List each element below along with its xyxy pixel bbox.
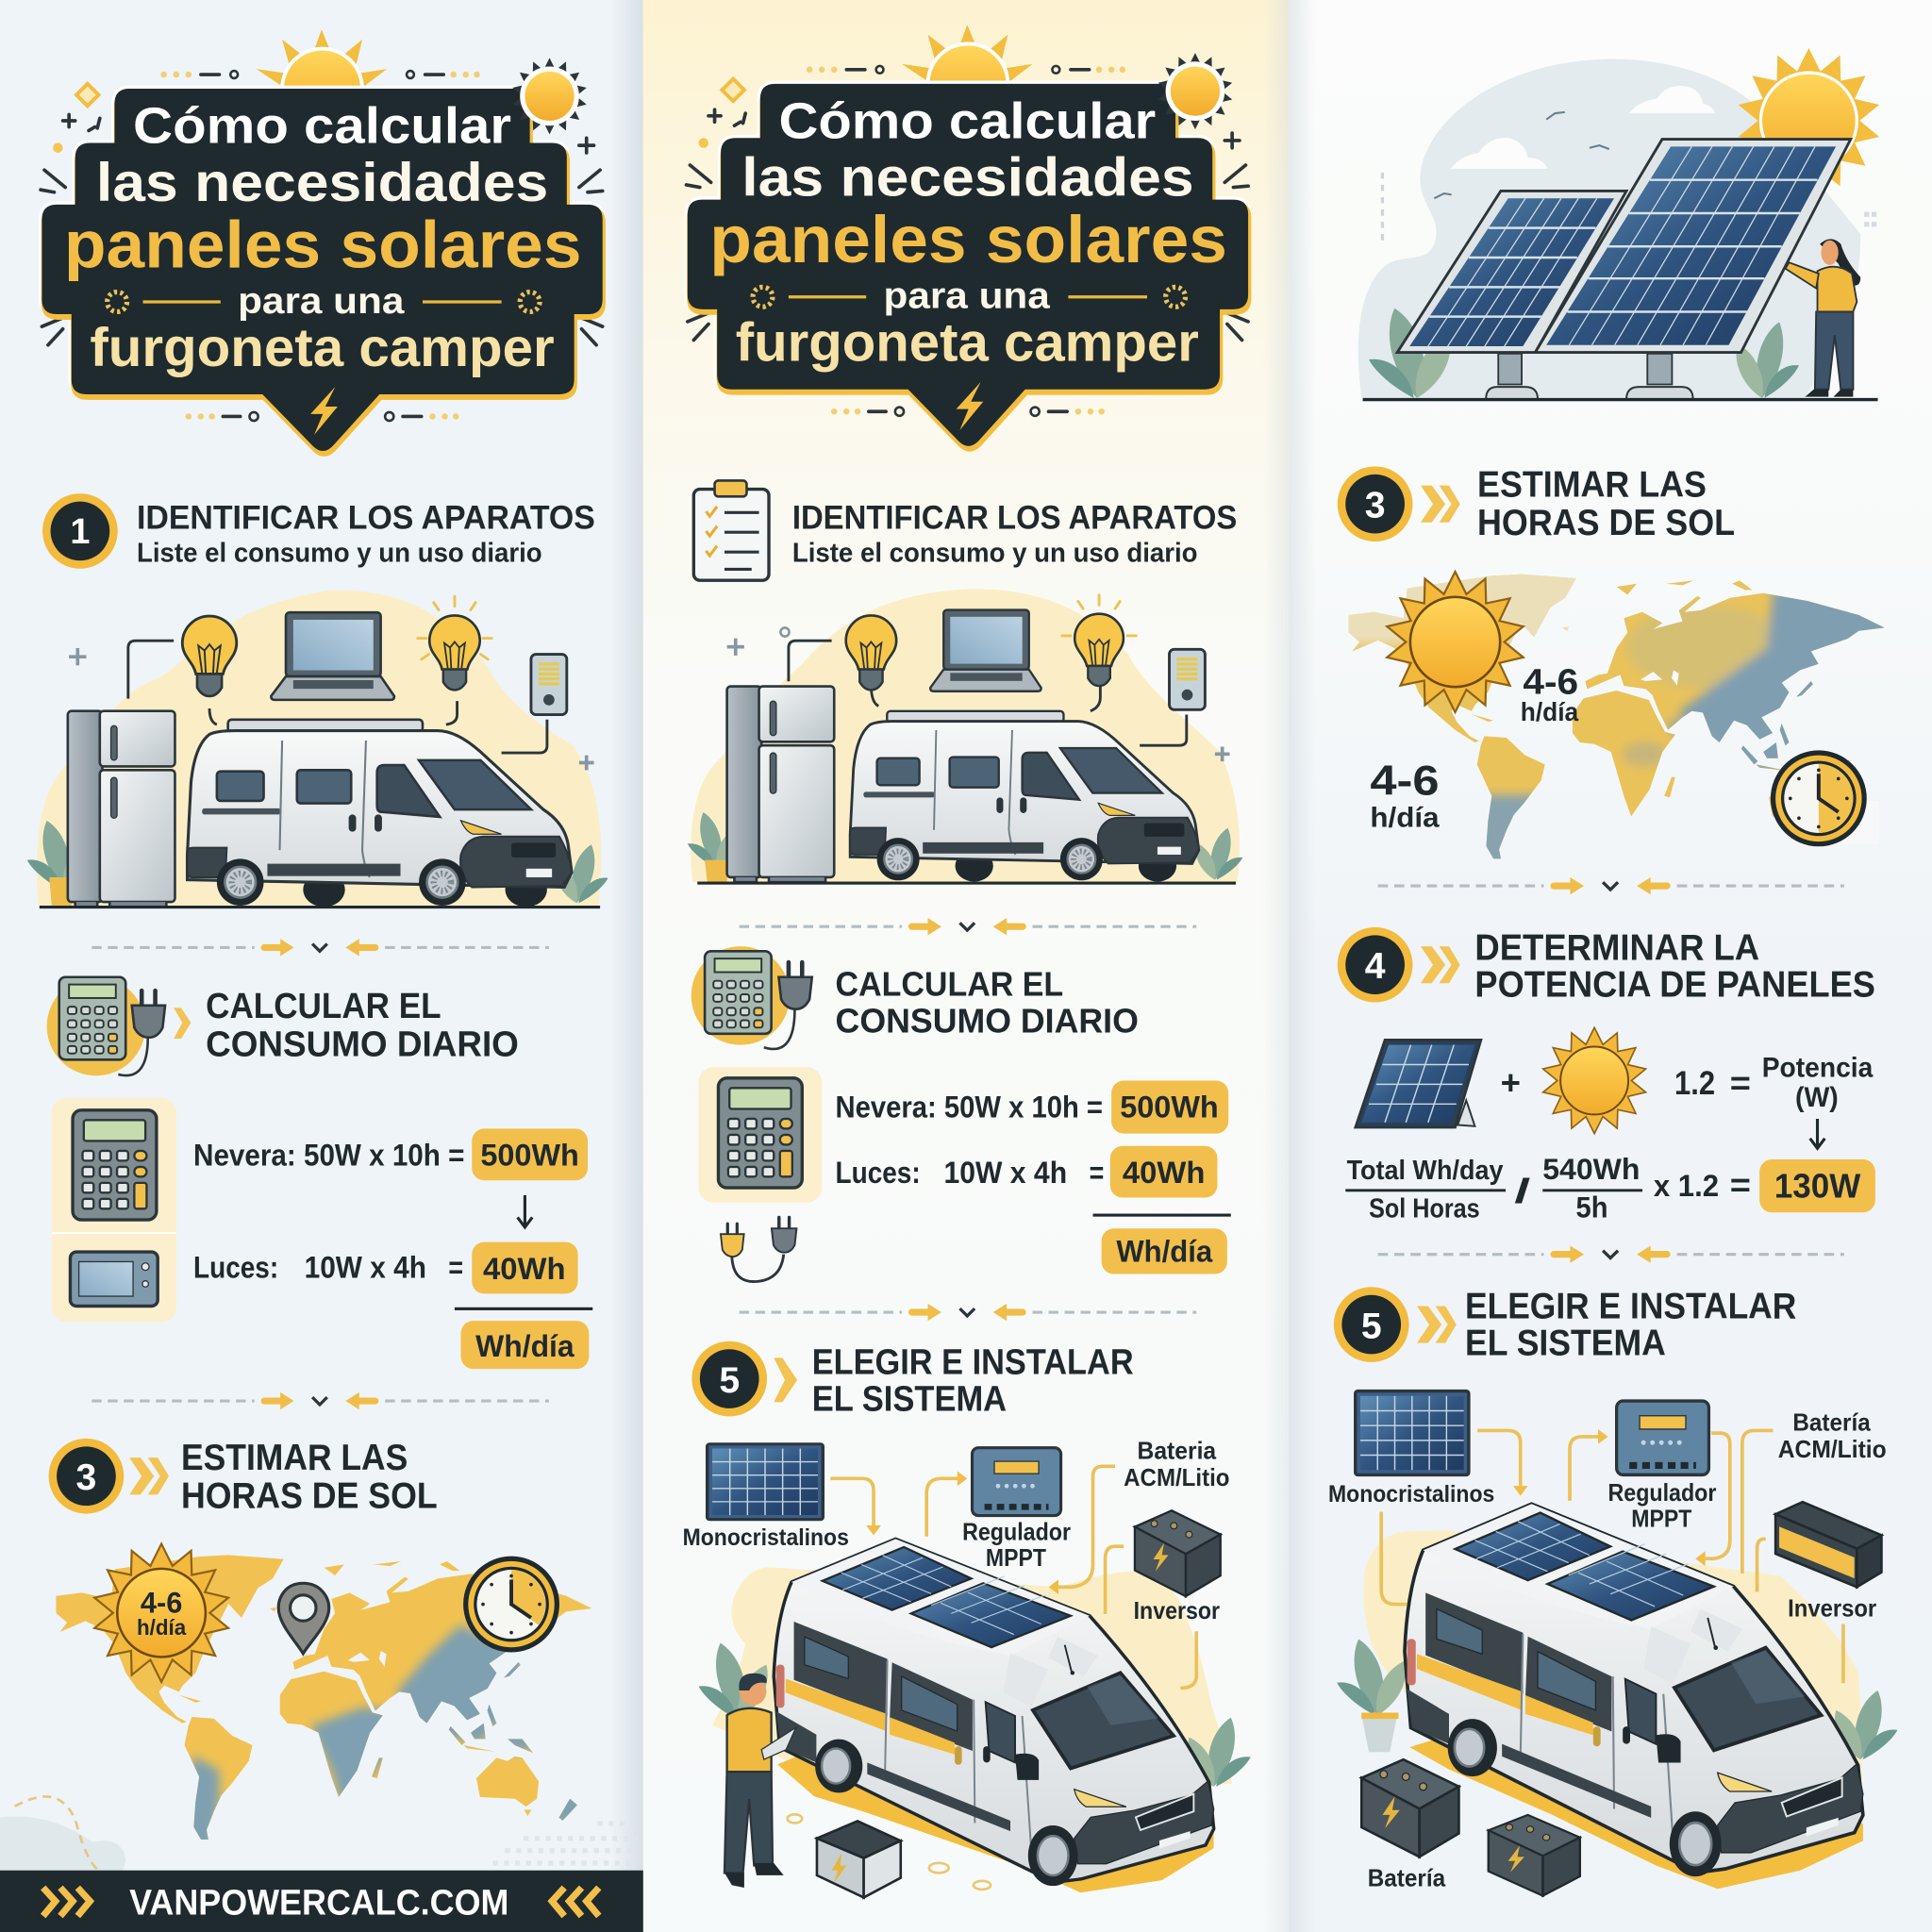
panel: daily consumption formula: 10W x 4h bbox=[943, 1155, 1067, 1190]
title banner bbox=[687, 25, 1249, 450]
title banner: Cómo calcular bbox=[778, 93, 1156, 149]
power formula: Sol Horas bbox=[1369, 1193, 1480, 1224]
step 1 heading: Liste el consumo y un uso diario bbox=[137, 539, 542, 569]
panel: daily consumption formula: = bbox=[448, 1249, 463, 1284]
component: inverter bbox=[1775, 1502, 1881, 1623]
step 1 heading: Liste el consumo y un uso diario bbox=[792, 539, 1198, 569]
step 4 heading: DETERMINAR LA bbox=[1474, 927, 1759, 968]
panel: daily consumption formula: 40Wh bbox=[1123, 1155, 1205, 1190]
step 5 heading: EL SISTEMA bbox=[1465, 1324, 1666, 1364]
sun badge: 4-6 h/día bbox=[94, 1544, 228, 1682]
component: regulator: MPPT bbox=[1631, 1504, 1691, 1532]
footer bar bbox=[0, 1871, 643, 1932]
icon: clock bbox=[463, 1557, 559, 1653]
panel: daily consumption formula bbox=[699, 1067, 1231, 1282]
power formula: 130W bbox=[1774, 1167, 1861, 1206]
component: regulator: MPPT bbox=[986, 1543, 1046, 1572]
illustration: solar panels with woman bbox=[1358, 48, 1879, 401]
icon: microwave bbox=[70, 1252, 158, 1306]
divider bbox=[1378, 1245, 1844, 1263]
step 2 heading: CONSUMO DIARIO bbox=[206, 1024, 519, 1064]
step 4 heading: POTENCIA DE PANELES bbox=[1474, 965, 1875, 1006]
title banner: para una bbox=[238, 281, 406, 322]
component: battery: Bateria bbox=[1138, 1436, 1217, 1464]
step 2 heading bbox=[691, 946, 1139, 1049]
component: regulator bbox=[962, 1448, 1071, 1572]
divider bbox=[92, 939, 549, 957]
power formula: = bbox=[1730, 1065, 1751, 1102]
batteries bbox=[1361, 1759, 1580, 1896]
panel: daily consumption formula: 500Wh bbox=[480, 1138, 579, 1173]
component: battery: ACM/Litio bbox=[1124, 1463, 1230, 1491]
power formula: x 1.2 bbox=[1654, 1168, 1719, 1203]
illustration: appliances and van bbox=[688, 589, 1242, 885]
component: panel: Monocristalinos bbox=[1328, 1482, 1494, 1507]
step 5 heading bbox=[1334, 1287, 1796, 1364]
panel: daily consumption formula: Nevera: 50W x 10h = bbox=[836, 1090, 1103, 1124]
icon: location pin bbox=[278, 1583, 329, 1654]
step 5 heading bbox=[691, 1341, 1134, 1420]
power formula: / bbox=[1514, 1172, 1530, 1210]
panel: daily consumption formula: Luces: bbox=[836, 1155, 921, 1190]
step 2 heading bbox=[47, 977, 519, 1075]
world map: h/día bbox=[1521, 697, 1579, 726]
component: regulator: Regulador bbox=[962, 1518, 1071, 1546]
step 3 heading bbox=[49, 1438, 438, 1517]
person: woman bbox=[1786, 239, 1860, 397]
panel: daily consumption formula: 10W x 4h bbox=[305, 1249, 426, 1284]
icon: plugs bbox=[721, 1217, 796, 1282]
panel: daily consumption formula: Wh/día bbox=[475, 1328, 575, 1363]
step 5 heading: 5 bbox=[1361, 1306, 1382, 1346]
world map: 4-6 bbox=[1370, 758, 1440, 804]
divider bbox=[1378, 877, 1844, 894]
step 5 heading: EL SISTEMA bbox=[812, 1380, 1007, 1420]
power formula: 540Wh bbox=[1542, 1153, 1640, 1186]
power formula bbox=[1345, 1027, 1875, 1224]
title banner: paneles solares bbox=[709, 202, 1227, 276]
panel: daily consumption formula bbox=[52, 1098, 592, 1369]
panel: column 2 bbox=[683, 25, 1251, 1897]
clouds bbox=[1450, 86, 1715, 169]
panel: column 1 bbox=[0, 29, 643, 1932]
battery with bolt bbox=[817, 1821, 901, 1897]
step 3 heading: HORAS DE SOL bbox=[1477, 503, 1735, 543]
step 4 heading bbox=[1338, 927, 1875, 1006]
illustration: appliances and van bbox=[27, 591, 608, 908]
step 3 heading: ESTIMAR LAS bbox=[1477, 464, 1707, 505]
system diagram bbox=[1328, 1391, 1897, 1896]
title banner: las necesidades bbox=[741, 148, 1194, 208]
component: lithium battery: ACM/Litio bbox=[1778, 1435, 1887, 1463]
panel: daily consumption formula: 40Wh bbox=[483, 1251, 566, 1286]
sun badge: 4-6 h/día: h/día bbox=[137, 1615, 187, 1640]
title banner: para una bbox=[883, 276, 1051, 317]
decoration: lower left hill and dots bbox=[0, 1796, 639, 1871]
step 3 heading: 3 bbox=[76, 1457, 96, 1498]
world map: 4-6 bbox=[1523, 662, 1578, 702]
divider bbox=[740, 918, 1196, 935]
step 1 heading bbox=[693, 480, 1237, 580]
title banner bbox=[41, 29, 604, 455]
panel: daily consumption formula: Wh/día bbox=[1116, 1233, 1213, 1268]
panel: column 3 bbox=[1324, 48, 1909, 1896]
power formula: Total Wh/day bbox=[1347, 1156, 1503, 1186]
icon: tilted solar panel bbox=[1356, 1040, 1481, 1127]
step 3 heading: ESTIMAR LAS bbox=[181, 1438, 408, 1478]
step 3 heading: HORAS DE SOL bbox=[181, 1476, 438, 1517]
panel: daily consumption formula: 500Wh bbox=[1120, 1090, 1219, 1124]
icon: sun bbox=[1387, 572, 1524, 712]
power formula: (W) bbox=[1795, 1082, 1839, 1113]
step 1 heading: 1 bbox=[70, 512, 90, 552]
component: lithium battery: Batería bbox=[1792, 1407, 1871, 1436]
step 1 heading bbox=[42, 493, 595, 569]
large solar panel bbox=[1535, 140, 1851, 353]
title banner: las necesidades bbox=[96, 153, 548, 213]
component: battery bbox=[1124, 1436, 1230, 1491]
world map bbox=[1349, 570, 1885, 858]
step 1 heading: IDENTIFICAR LOS APARATOS bbox=[792, 499, 1237, 536]
arrows bbox=[830, 1466, 1196, 1688]
step 2 heading: CALCULAR EL bbox=[836, 964, 1063, 1003]
world map: h/día bbox=[1370, 802, 1440, 833]
arrows bbox=[1381, 1429, 1843, 1683]
batteries: Batería bbox=[1368, 1864, 1446, 1892]
step 3 heading: 3 bbox=[1365, 486, 1386, 526]
power formula: + bbox=[1501, 1063, 1521, 1102]
component: inverter: Inversor bbox=[1134, 1596, 1220, 1624]
component: lithium battery bbox=[1778, 1407, 1887, 1463]
divider bbox=[92, 1392, 549, 1409]
person with tablet bbox=[724, 1674, 796, 1888]
step 1 heading: IDENTIFICAR LOS APARATOS bbox=[137, 499, 595, 536]
component: panel bbox=[1328, 1391, 1494, 1507]
step 5 heading: ELEGIR E INSTALAR bbox=[812, 1342, 1134, 1382]
power formula: 5h bbox=[1576, 1191, 1607, 1224]
step 5 heading: 5 bbox=[719, 1360, 740, 1401]
title banner: Cómo calcular bbox=[133, 99, 511, 155]
step 5 heading: ELEGIR E INSTALAR bbox=[1465, 1287, 1796, 1327]
title banner: paneles solares bbox=[64, 207, 581, 281]
icon: clipboard checklist bbox=[693, 480, 769, 580]
power formula: Potencia bbox=[1762, 1053, 1874, 1084]
component: panel: Monocristalinos bbox=[683, 1525, 849, 1551]
step 3 heading bbox=[1338, 464, 1735, 543]
power formula: = bbox=[1730, 1167, 1751, 1204]
component: regulator: Regulador bbox=[1607, 1478, 1716, 1507]
step 2 heading: CONSUMO DIARIO bbox=[836, 1002, 1139, 1041]
footer bar: VANPOWERCALC.COM bbox=[129, 1884, 508, 1924]
component: regulator bbox=[1607, 1401, 1716, 1532]
power formula: 1.2 bbox=[1674, 1065, 1715, 1102]
decoration: coins bbox=[788, 1814, 991, 1890]
sun badge: 4-6 h/día: 4-6 bbox=[141, 1587, 182, 1620]
panel: daily consumption formula: = bbox=[1090, 1155, 1104, 1190]
title banner: furgoneta camper bbox=[90, 318, 555, 378]
panel: daily consumption formula: Luces: bbox=[193, 1249, 278, 1284]
step 2 heading: CALCULAR EL bbox=[206, 987, 441, 1026]
component: panel bbox=[683, 1444, 849, 1551]
step 4 heading: 4 bbox=[1365, 946, 1386, 987]
icon: sun bbox=[1739, 48, 1879, 193]
system diagram bbox=[683, 1436, 1251, 1897]
world map bbox=[56, 1544, 591, 1848]
component: inverter bbox=[1134, 1510, 1221, 1624]
small solar panel bbox=[1397, 191, 1626, 353]
panel: daily consumption formula: Nevera: 50W x 10h = bbox=[193, 1138, 464, 1173]
component: inverter: Inversor bbox=[1788, 1594, 1876, 1623]
divider bbox=[740, 1304, 1196, 1321]
icon: clock bbox=[1771, 750, 1867, 846]
title banner: furgoneta camper bbox=[736, 313, 1199, 374]
